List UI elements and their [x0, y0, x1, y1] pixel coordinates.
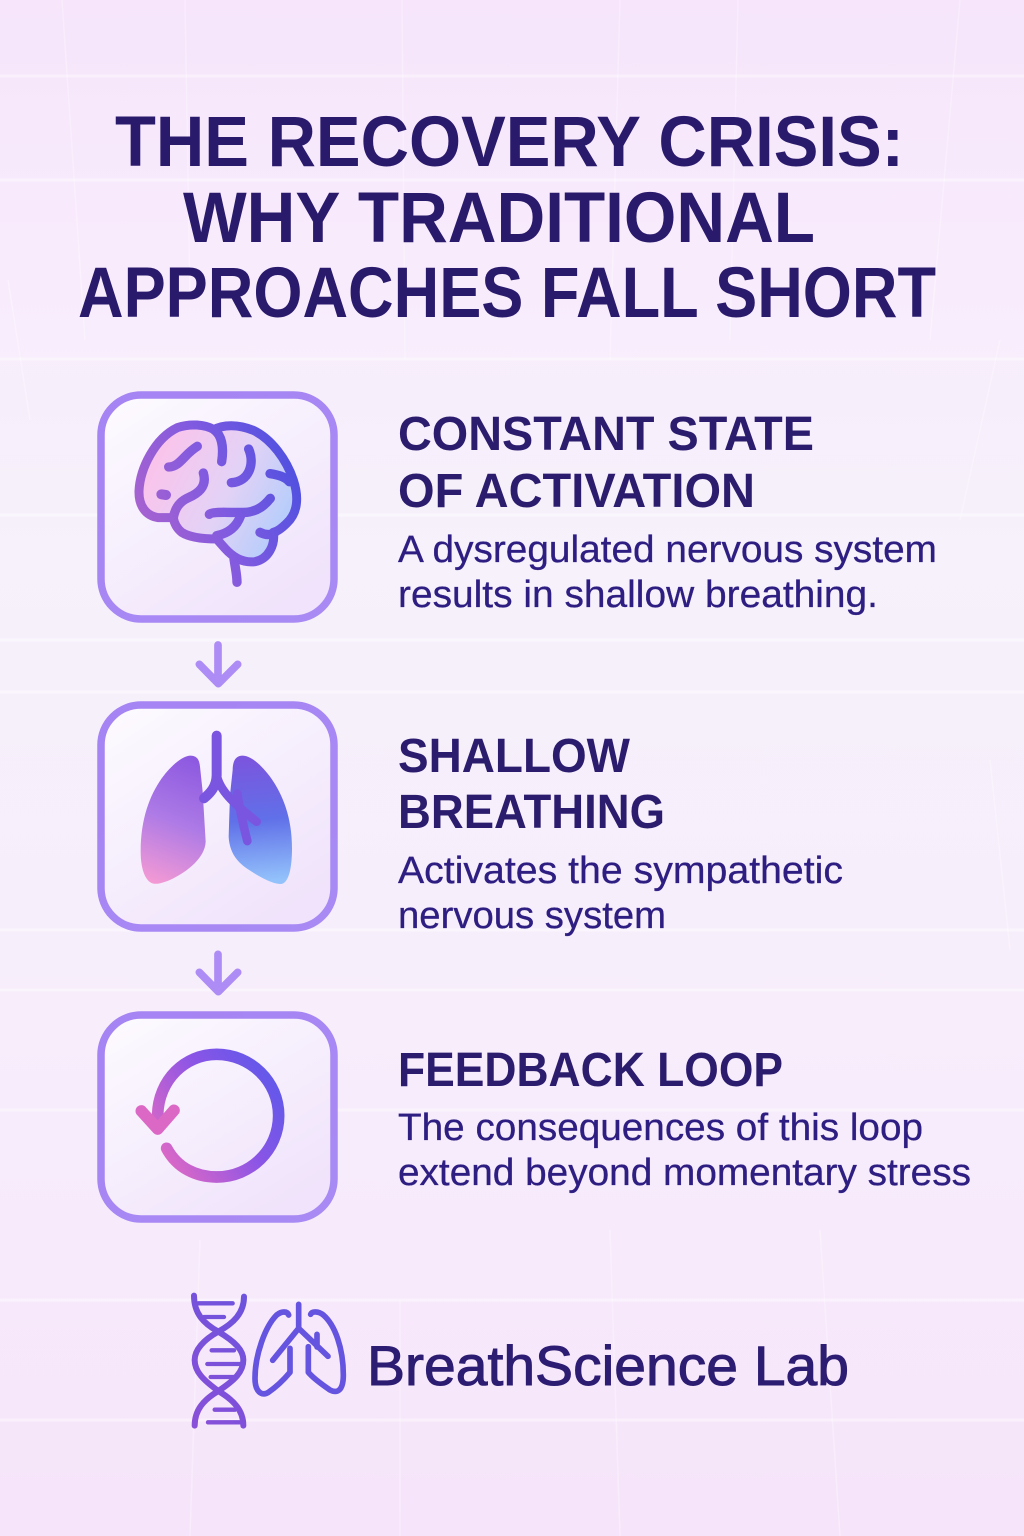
title: WHY TRADITIONAL: [183, 179, 815, 258]
icon: lungs outline: [255, 1304, 343, 1394]
panel: lungs icon card: [101, 705, 334, 928]
description: constant state: A dysregulated nervous system: [398, 529, 937, 571]
description: feedback loop: [398, 1107, 971, 1194]
title: THE RECOVERY CRISIS:: [115, 103, 904, 182]
heading: feedback loop: FEEDBACK LOOP: [398, 1044, 783, 1097]
panel: brain icon card: [101, 395, 334, 619]
text block: feedback loop: [398, 1044, 971, 1194]
icon: circular loop arrow: [141, 1054, 279, 1177]
description: shallow breathing: Activates the sympathetic: [398, 850, 843, 892]
heading: constant state: CONSTANT STATE: [398, 408, 814, 461]
description: constant state: results in shallow breathing.: [398, 574, 878, 616]
text block: constant state of activation: [398, 408, 937, 616]
heading: constant state: OF ACTIVATION: [398, 465, 755, 518]
panel: feedback loop icon card: [101, 1015, 334, 1219]
description: shallow breathing: [398, 850, 843, 937]
logo: BreathScience Lab: [194, 1296, 849, 1426]
arrow: lungs to loop: [199, 954, 238, 992]
icon: DNA helix: [194, 1296, 244, 1426]
icon: brain: [139, 425, 297, 582]
heading: shallow breathing: SHALLOW: [398, 730, 631, 783]
title: [78, 103, 936, 333]
heading: shallow breathing: BREATHING: [398, 786, 665, 839]
description: feedback loop: extend beyond momentary stress: [398, 1152, 971, 1194]
text block: shallow breathing: [398, 730, 843, 937]
heading: shallow breathing: [398, 730, 665, 839]
logo: BreathScience Lab: BreathScience Lab: [367, 1334, 849, 1397]
title: APPROACHES FALL SHORT: [78, 254, 936, 333]
description: constant state: [398, 529, 937, 616]
description: shallow breathing: nervous system: [398, 895, 666, 937]
description: feedback loop: The consequences of this loop: [398, 1107, 923, 1149]
heading: constant state: [398, 408, 814, 518]
arrow: brain to lungs: [199, 645, 238, 684]
icon: lungs: [141, 736, 292, 884]
